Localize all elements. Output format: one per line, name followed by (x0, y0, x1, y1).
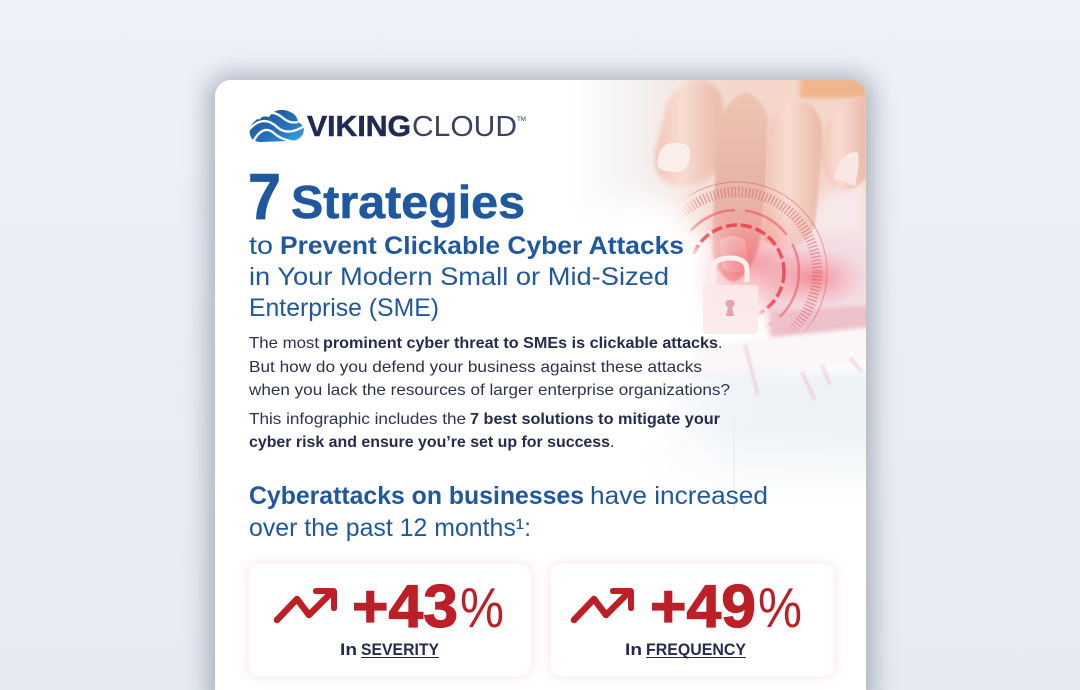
title: Enterprise (SME) (249, 294, 439, 322)
red glow (699, 212, 806, 316)
section heading: over the past 12 months¹: (249, 514, 531, 542)
section heading (249, 482, 768, 542)
finger: third (764, 102, 822, 250)
nail on pressing finger (720, 236, 750, 272)
wordmark: VIKING (307, 111, 411, 143)
stat card: frequency: % (758, 576, 802, 640)
stat card: severity: SEVERITY (361, 640, 440, 659)
icon: padlock (703, 258, 758, 334)
icon: cloud waves (247, 110, 306, 142)
logo: TM (517, 116, 526, 123)
finger: left (655, 79, 723, 186)
nail: fourth finger (834, 152, 859, 186)
intro text (248, 335, 730, 451)
title: Strategies (291, 176, 525, 228)
faint vertical line (734, 420, 735, 510)
title: 7 (248, 160, 281, 233)
fades blending photo into card (608, 196, 728, 294)
stat card: severity: % (460, 576, 504, 640)
value: +49 (650, 573, 756, 640)
intro text: . (610, 434, 614, 451)
logo: CLOUD (412, 111, 517, 143)
stat card: severity (249, 564, 531, 676)
finger: fourth (822, 98, 866, 190)
red streaks (745, 345, 862, 400)
label: In (340, 640, 357, 659)
infographic page (184, 60, 897, 690)
finger: pressing (712, 92, 768, 282)
security dial rings (682, 182, 828, 334)
keyboard slab (756, 236, 866, 327)
intro text: . (718, 335, 722, 352)
intro text: The most (249, 335, 320, 352)
nail: left finger (658, 143, 690, 172)
hero photo: hand pressing security lock (608, 80, 866, 510)
value: +43 (352, 573, 458, 640)
title: Prevent Clickable Cyber Attacks (280, 232, 684, 260)
intro text: This infographic includes the (249, 411, 466, 428)
card shadow (209, 76, 872, 690)
white card panel (215, 80, 866, 690)
intro text: prominent cyber threat to SMEs is clickable attacks (323, 335, 718, 352)
pale gap behind fingers (810, 182, 866, 236)
label: In (625, 640, 642, 659)
intro text: when you lack the resources of larger enterprise organizations? (248, 382, 730, 399)
title: to (249, 232, 273, 260)
section heading: have increased (590, 482, 768, 510)
intro text: But how do you defend your business against these attacks (249, 359, 702, 376)
section heading: Cyberattacks on businesses (249, 482, 584, 510)
icon: trend arrow up (574, 588, 634, 620)
stat card: frequency (551, 564, 834, 676)
lower desk fade (694, 372, 866, 470)
logo (247, 110, 526, 143)
intro text: cyber risk and ensure you’re set up for success (249, 434, 610, 451)
title: in Your Modern Small or Mid-Sized (249, 263, 669, 291)
stat card: frequency: FREQUENCY (646, 640, 747, 659)
intro text: 7 best solutions to mitigate your (470, 411, 720, 428)
title (248, 160, 684, 322)
icon: trend arrow up (277, 588, 337, 620)
